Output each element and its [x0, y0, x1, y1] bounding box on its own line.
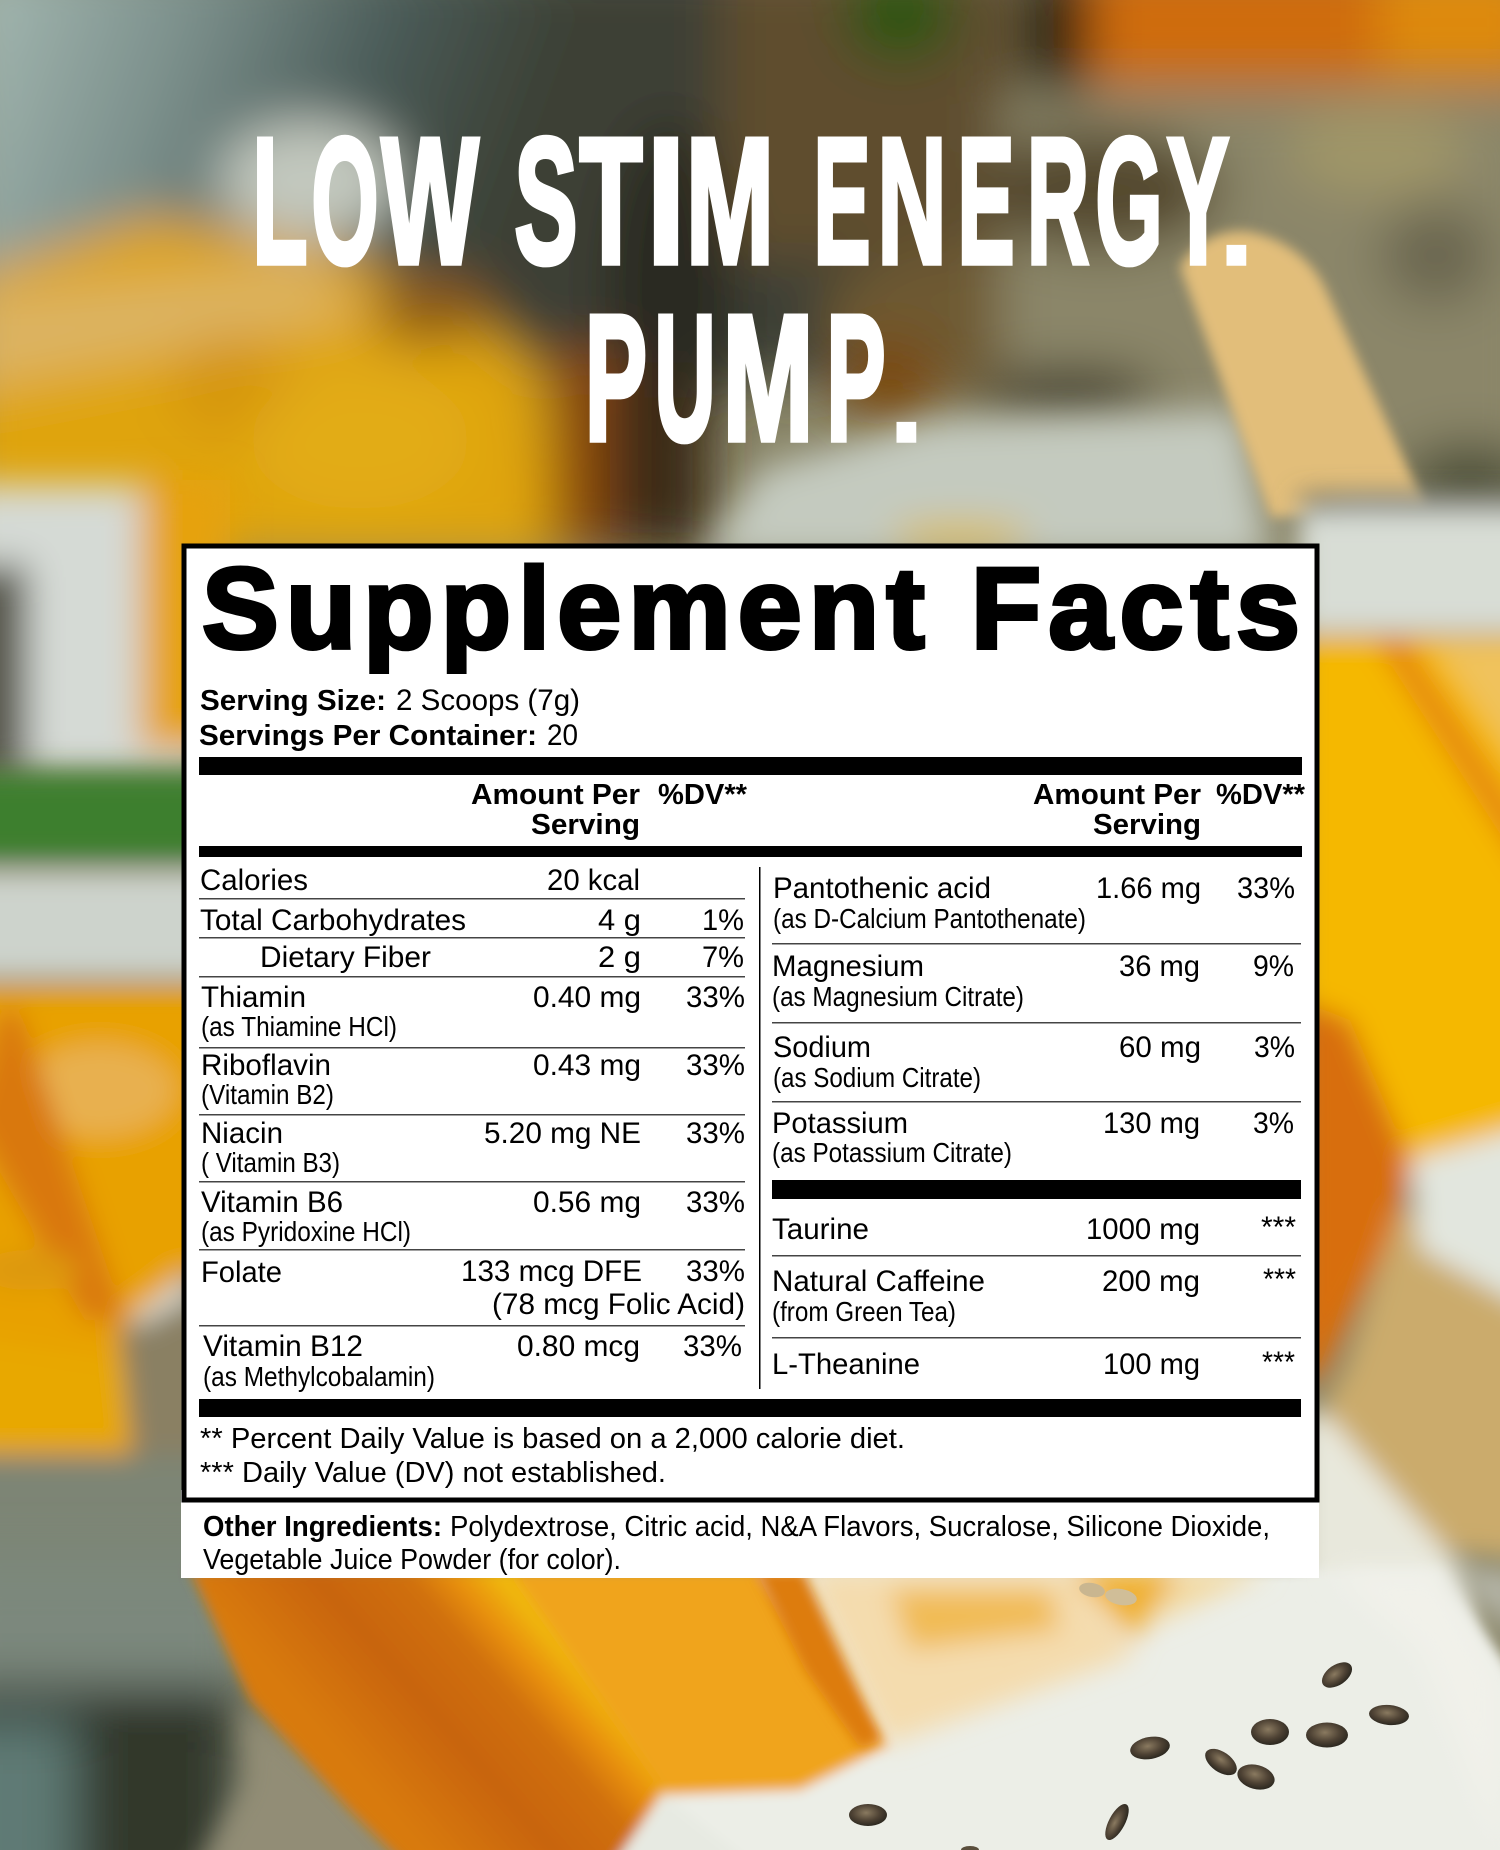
- row: taurine: Taurine: [772, 1213, 869, 1246]
- row: sodium: (as Sodium Citrate): [773, 1062, 981, 1093]
- other ingredients: Vegetable Juice Powder (for color).: [203, 1544, 621, 1576]
- headline: L: [252, 101, 308, 301]
- row: natural caffeine: [772, 1263, 1296, 1327]
- left column nutrient rows: [200, 864, 745, 1392]
- left column header: Amount Per: [471, 779, 640, 811]
- headline: .: [887, 316, 926, 473]
- other ingredients: [203, 1511, 1270, 1576]
- row: total carbohydrates: Total Carbohydrates: [200, 904, 466, 937]
- row: l-theanine: ***: [1262, 1346, 1295, 1379]
- row: riboflavin: [201, 1049, 745, 1110]
- rules: [199, 757, 1302, 1417]
- row: vitamin b12: [203, 1330, 742, 1392]
- row: natural caffeine: ***: [1263, 1263, 1296, 1296]
- right column header: Amount Per: [1033, 779, 1201, 811]
- row: magnesium: 36 mg: [1119, 950, 1200, 983]
- row: pantothenic acid: 33%: [1237, 872, 1295, 905]
- serving information: Serving Size:: [200, 685, 386, 717]
- headline: Y: [1167, 101, 1229, 301]
- left column header: %DV**: [658, 779, 748, 811]
- footnotes: *** Daily Value (DV) not established.: [200, 1457, 666, 1489]
- row: thiamin: Thiamin: [201, 981, 306, 1014]
- row: riboflavin: 33%: [686, 1049, 745, 1082]
- row: dietary fiber: 2 g: [598, 941, 641, 974]
- row: riboflavin: 0.43 mg: [533, 1049, 641, 1082]
- row: l-theanine: L-Theanine: [772, 1348, 920, 1381]
- footnotes: [200, 1423, 905, 1489]
- row: potassium: (as Potassium Citrate): [772, 1137, 1012, 1168]
- row: niacin: 33%: [686, 1117, 745, 1150]
- headline: .: [1217, 139, 1256, 296]
- headline: E: [814, 101, 870, 301]
- row: taurine: [772, 1211, 1296, 1246]
- row: total carbohydrates: 4 g: [598, 904, 641, 937]
- row: l-theanine: [772, 1346, 1295, 1381]
- other ingredients: Polydextrose, Citric acid, N&A Flavors, Sucralose, Silicone Dioxide,: [450, 1511, 1270, 1543]
- row: total carbohydrates: 1%: [702, 904, 744, 937]
- row: thiamin: (as Thiamine HCl): [201, 1011, 397, 1042]
- row: magnesium: [772, 950, 1294, 1012]
- panel: supplement facts label: [181, 545, 1319, 1578]
- headline: O: [312, 101, 378, 301]
- row: riboflavin: (Vitamin B2): [201, 1079, 334, 1110]
- row: dietary fiber: 7%: [702, 941, 744, 974]
- headline: P: [585, 278, 647, 478]
- row: sodium: 60 mg: [1119, 1031, 1201, 1064]
- headline: I: [647, 101, 685, 301]
- serving information: 2 Scoops (7g): [396, 684, 580, 717]
- headline: P: [826, 278, 886, 478]
- headline: E: [958, 101, 1014, 301]
- row: folate: Folate: [201, 1256, 282, 1289]
- headline: M: [722, 278, 814, 478]
- headline: R: [1027, 101, 1089, 301]
- row: vitamin b6: 33%: [686, 1186, 745, 1219]
- heading: Supplement Facts: Supplement Facts: [202, 545, 1300, 673]
- row: l-theanine: 100 mg: [1103, 1348, 1200, 1381]
- row: folate: [201, 1255, 745, 1321]
- row: sodium: 3%: [1254, 1031, 1295, 1064]
- row: thiamin: 33%: [686, 981, 745, 1014]
- row: pantothenic acid: (as D-Calcium Pantothenate): [773, 903, 1086, 934]
- row: natural caffeine: 200 mg: [1102, 1265, 1200, 1298]
- row: vitamin b6: Vitamin B6: [201, 1186, 343, 1219]
- row: natural caffeine: (from Green Tea): [772, 1296, 956, 1327]
- row: calories: Calories: [200, 864, 308, 897]
- row: potassium: 3%: [1253, 1107, 1294, 1140]
- row: pantothenic acid: 1.66 mg: [1096, 872, 1201, 905]
- row: potassium: Potassium: [772, 1107, 908, 1140]
- row: riboflavin: Riboflavin: [201, 1049, 331, 1082]
- row: magnesium: 9%: [1253, 950, 1294, 983]
- headline: N: [878, 101, 946, 301]
- chia seeds: [849, 1581, 1410, 1850]
- left column header: [471, 779, 748, 841]
- row: magnesium: Magnesium: [772, 950, 924, 983]
- row: sodium: [773, 1031, 1295, 1093]
- row: thiamin: [201, 981, 745, 1042]
- left column header: Serving: [531, 809, 640, 841]
- row: potassium: [772, 1107, 1294, 1168]
- right column header: %DV**: [1216, 779, 1306, 811]
- row: niacin: [201, 1117, 745, 1178]
- row: dietary fiber: Dietary Fiber: [260, 941, 431, 974]
- serving information: Servings Per Container:: [199, 720, 537, 752]
- row: thiamin: 0.40 mg: [533, 981, 641, 1014]
- row: folate: (78 mcg Folic Acid): [492, 1288, 745, 1321]
- row: vitamin b12: 33%: [683, 1330, 742, 1363]
- serving information: 20: [547, 719, 578, 752]
- row: dietary fiber: [260, 941, 744, 974]
- row: taurine: 1000 mg: [1086, 1213, 1200, 1246]
- row: niacin: Niacin: [201, 1117, 283, 1150]
- row: niacin: ( Vitamin B3): [201, 1147, 340, 1178]
- row: pantothenic acid: Pantothenic acid: [773, 872, 991, 905]
- headline: G: [1096, 101, 1162, 301]
- row: vitamin b6: (as Pyridoxine HCl): [201, 1216, 411, 1247]
- row: vitamin b6: 0.56 mg: [533, 1186, 641, 1219]
- headline: M: [686, 101, 774, 301]
- row: calories: 20 kcal: [547, 864, 640, 897]
- row: magnesium: (as Magnesium Citrate): [772, 981, 1024, 1012]
- row: vitamin b12: 0.80 mcg: [517, 1330, 640, 1363]
- row: calories: [200, 864, 640, 897]
- headline: [252, 101, 1256, 478]
- right column header: Serving: [1093, 809, 1201, 841]
- headline: U: [654, 278, 716, 478]
- headline: S: [514, 101, 578, 301]
- row: folate: 33%: [686, 1255, 745, 1288]
- right column header: [1033, 779, 1306, 841]
- row: vitamin b6: [201, 1186, 745, 1247]
- row: pantothenic acid: [773, 872, 1295, 934]
- headline: T: [580, 101, 642, 301]
- row: folate: 133 mcg DFE: [461, 1255, 642, 1288]
- other ingredients: Other Ingredients:: [203, 1511, 442, 1543]
- right column nutrient rows: [772, 872, 1296, 1381]
- serving information: [199, 684, 580, 752]
- row: vitamin b12: (as Methylcobalamin): [203, 1361, 435, 1392]
- headline: W: [382, 101, 479, 301]
- row: total carbohydrates: [200, 904, 744, 937]
- row: sodium: Sodium: [773, 1031, 871, 1064]
- row: natural caffeine: Natural Caffeine: [772, 1265, 985, 1298]
- footnotes: ** Percent Daily Value is based on a 2,000 calorie diet.: [200, 1423, 905, 1455]
- row: taurine: ***: [1261, 1211, 1296, 1244]
- row: niacin: 5.20 mg NE: [484, 1117, 641, 1150]
- row: vitamin b12: Vitamin B12: [203, 1330, 363, 1363]
- row: potassium: 130 mg: [1103, 1107, 1200, 1140]
